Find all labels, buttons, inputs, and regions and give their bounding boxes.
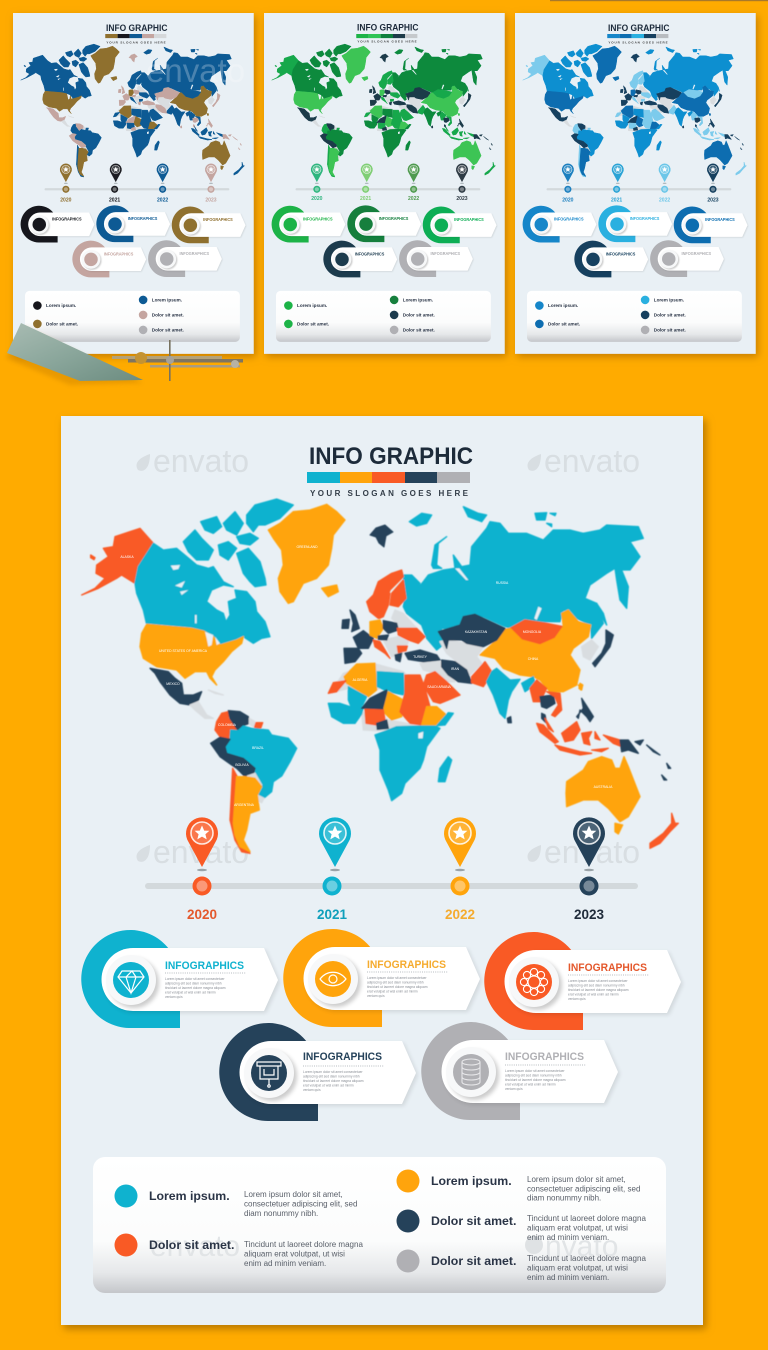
thumbnail: brown and blue variant: INFOGRAPHICS [203, 217, 233, 222]
card text [505, 1051, 586, 1091]
thumbnail: blue variant: INFOGRAPHICS [606, 251, 636, 256]
map country labels: BRAZIL [252, 746, 264, 750]
map country labels: IRAN [451, 667, 460, 671]
card text: adipiscing elit sed diam nonummy nibh [367, 980, 424, 984]
title colour bar [307, 472, 470, 483]
thumbnail: brown and blue variant: YOUR SLOGAN GOES HERE [106, 40, 166, 44]
thumbnail: green variant: INFO GRAPHIC [357, 22, 419, 32]
thumbnail: blue variant: 2022 [659, 198, 670, 204]
legend item: red [114, 1234, 363, 1268]
card text [303, 1051, 384, 1092]
watermark: envato legend right: nvato [545, 1230, 618, 1263]
timeline 2020: 2020 [187, 907, 217, 922]
card: red flower [484, 932, 683, 1030]
icon: eye [320, 972, 346, 986]
card text: Lorem ipsum dolor sit amet consectetuer [367, 976, 427, 980]
drawing compass [112, 340, 243, 381]
legend item: gray: Tincidunt ut laoreet dolore magna [527, 1254, 646, 1263]
main poster panel [61, 416, 703, 1325]
legend item: orange [396, 1170, 640, 1202]
card text: Lorem ipsum dolor sit amet consectetuer [505, 1069, 565, 1073]
card text: adipiscing elit sed diam nonummy nibh [568, 984, 625, 988]
legend item: gray [396, 1250, 646, 1282]
card text: tincidunt ut laoreet dolore magna aliquam [568, 988, 629, 992]
watermark on first thumbnail: envato [146, 52, 245, 89]
legend item: teal: diam nonummy nibh. [244, 1209, 318, 1218]
map country labels: SAUDI ARABIA [427, 685, 452, 689]
thumbnail: blue variant: INFOGRAPHICS [554, 216, 584, 221]
watermark: envato top left: envato [153, 443, 249, 479]
thumbnail: green variant [264, 13, 507, 357]
thumbnail: brown and blue variant: 2023 [205, 198, 217, 204]
thumbnail: blue variant: INFO GRAPHIC [608, 23, 670, 33]
card text: erat volutpat ut wisi enim ad minim [165, 990, 216, 994]
legend item: red: Dolor sit amet. [149, 1238, 234, 1252]
legend item: gray: aliquam erat volutpat, ut wisi [527, 1264, 628, 1272]
card text: adipiscing elit sed diam nonummy nibh [505, 1074, 562, 1078]
card text [568, 962, 649, 1001]
card text: tincidunt ut laoreet dolore magna aliquam [165, 986, 226, 990]
legend item: navy: Dolor sit amet. [431, 1214, 516, 1228]
timeline 2023: 2023 [574, 907, 605, 922]
card text: INFOGRAPHICS [303, 1051, 382, 1063]
card text: adipiscing elit sed diam nonummy nibh [303, 1074, 360, 1078]
card text: INFOGRAPHICS [505, 1051, 584, 1063]
thumbnail: green variant: Lorem ipsum. [297, 303, 327, 308]
map country labels: TURKEY [413, 655, 428, 659]
map country labels: BOLIVIA [235, 763, 249, 767]
legend item: orange: Lorem ipsum. [431, 1174, 512, 1188]
map country labels: CHINA [528, 657, 539, 661]
card text [165, 960, 246, 999]
map country labels: MONGOLIA [523, 630, 542, 634]
thumbnail: brown and blue variant: 2022 [157, 198, 168, 204]
thumbnail: green variant: Dolor sit amet. [297, 321, 329, 326]
legend panel [93, 1157, 666, 1293]
thumbnail: green variant: INFOGRAPHICS [355, 251, 385, 256]
watermark: envato legend left: envato [150, 1230, 240, 1263]
thumbnail: blue variant: 2020 [562, 198, 574, 204]
thumbnail: blue variant: 2023 [707, 198, 719, 204]
timeline 2022 [444, 817, 476, 922]
slogan: YOUR SLOGAN GOES HERE [310, 489, 469, 498]
thumbnail: blue variant: Dolor sit amet. [654, 312, 686, 317]
watermark: envato middle right: envato [544, 834, 640, 870]
legend item: teal: consectetuer adipiscing elit, sed [244, 1200, 357, 1208]
legend item: red: enim ad minim veniam. [244, 1259, 326, 1268]
card text: veniam quis [568, 997, 586, 1001]
card text: INFOGRAPHICS [165, 960, 244, 972]
card: teal diamond [81, 930, 280, 1028]
watermark: envato middle left: envato [153, 834, 249, 870]
thumbnail: brown and blue variant: 2021 [109, 198, 120, 204]
legend item: orange: diam nonummy nibh. [527, 1194, 601, 1202]
thumbnail: green variant: INFOGRAPHICS [379, 216, 409, 221]
card: navy presentation [219, 1023, 418, 1121]
legend item: orange: Lorem ipsum dolor sit amet, [527, 1175, 626, 1184]
icon: database [462, 1059, 480, 1085]
thumbnail: green variant: Dolor sit amet. [403, 327, 435, 332]
thumbnail: brown and blue variant: INFOGRAPHICS [52, 216, 82, 221]
legend item: teal: Lorem ipsum. [149, 1189, 230, 1203]
thumbnail: blue variant [515, 13, 758, 357]
thumbnail: blue variant: YOUR SLOGAN GOES HERE [608, 40, 668, 44]
thumbnail: blue variant: Dolor sit amet. [654, 327, 686, 332]
thumbnail: brown and blue variant: 2020 [60, 198, 72, 204]
thumbnail: brown and blue variant [13, 13, 256, 357]
legend item: teal [114, 1184, 357, 1218]
card text: Lorem ipsum dolor sit amet consectetuer [165, 977, 225, 981]
card text: veniam quis [367, 994, 385, 998]
legend item: orange: consectetuer adipiscing elit, sed [527, 1184, 640, 1194]
thumbnail: brown and blue variant: INFOGRAPHICS [180, 251, 209, 256]
thumbnail: green variant: Dolor sit amet. [403, 312, 435, 317]
thumbnail: blue variant: Dolor sit amet. [548, 321, 580, 326]
thumbnail: brown and blue variant: Dolor sit amet. [46, 321, 78, 326]
timeline bar [145, 883, 638, 889]
thumbnail: green variant: INFOGRAPHICS [303, 216, 333, 221]
card text: erat volutpat ut wisi enim ad minim [367, 990, 418, 994]
watermark: envato top right: envato [544, 443, 640, 479]
map country labels: ARGENTINA [234, 803, 255, 807]
card text: veniam quis [303, 1088, 321, 1092]
paper roll [6, 323, 143, 385]
main poster panel shadow [64, 420, 706, 1329]
card text: INFOGRAPHICS [568, 962, 647, 974]
thumbnail: blue variant: INFOGRAPHICS [705, 217, 735, 222]
icon: presentation board [257, 1062, 281, 1087]
timeline 2021 [317, 817, 351, 922]
card text: tincidunt ut laoreet dolore magna aliquam [367, 985, 428, 989]
title: INFO GRAPHIC [309, 443, 473, 470]
card text: INFOGRAPHICS [367, 959, 446, 971]
thumbnail: green variant: 2020 [311, 196, 323, 202]
map country labels: MEXICO [166, 682, 180, 686]
thumbnail: blue variant: Lorem ipsum. [548, 303, 578, 308]
thumbnail: green variant: 2023 [456, 196, 468, 202]
icon: diamond [118, 971, 144, 993]
card: orange eye [283, 929, 482, 1027]
thumbnail: blue variant: Lorem ipsum. [654, 297, 684, 302]
thumbnail: brown and blue variant: Dolor sit amet. [152, 312, 184, 317]
thumbnail: brown and blue variant: INFOGRAPHICS [128, 216, 158, 221]
thumbnail: brown and blue variant: Dolor sit amet. [152, 327, 184, 332]
legend item: navy: aliquam erat volutpat, ut wisi [527, 1224, 628, 1232]
thumbnail: brown and blue variant: INFOGRAPHICS [104, 251, 134, 256]
map country labels [120, 545, 613, 807]
legend item: gray: Dolor sit amet. [431, 1254, 516, 1268]
timeline 2021: 2021 [317, 907, 348, 922]
thumbnail: green variant: INFOGRAPHICS [454, 217, 484, 222]
map country labels: ALGERIA [353, 678, 368, 682]
map country labels: GREENLAND [296, 545, 318, 549]
thumbnail: green variant: 2022 [408, 196, 419, 202]
map country labels: ALASKA [120, 555, 134, 559]
map country labels: COLOMBIA [218, 723, 237, 727]
icon: flower [520, 968, 548, 996]
card text [367, 959, 448, 998]
legend item: red: Tincidunt ut laoreet dolore magna [244, 1240, 363, 1249]
legend item: navy [396, 1210, 646, 1242]
legend item: navy: Tincidunt ut laoreet dolore magna [527, 1214, 646, 1223]
card text: tincidunt ut laoreet dolore magna aliquam [505, 1078, 566, 1082]
thumbnail: green variant: Lorem ipsum. [403, 297, 433, 302]
thumbnail: blue variant: INFOGRAPHICS [682, 251, 711, 256]
legend item: teal: Lorem ipsum dolor sit amet, [244, 1190, 343, 1199]
world map [82, 499, 678, 853]
legend item: gray: enim ad minim veniam. [527, 1273, 609, 1282]
legend item: red: aliquam erat volutpat, ut wisi [244, 1250, 345, 1258]
thumbnail: green variant: INFOGRAPHICS [430, 251, 460, 256]
card text: erat volutpat ut wisi enim ad minim [568, 992, 619, 996]
thumbnail: green variant: YOUR SLOGAN GOES HERE [357, 40, 417, 44]
card text: veniam quis [505, 1087, 523, 1091]
card text: erat volutpat ut wisi enim ad minim [303, 1084, 354, 1088]
timeline 2022: 2022 [445, 907, 475, 922]
map country labels: UNITED STATES OF AMERICA [159, 649, 208, 653]
card: gray database [421, 1022, 620, 1120]
card text: adipiscing elit sed diam nonummy nibh [165, 982, 222, 986]
map country labels: RUSSIA [496, 581, 509, 585]
map country labels: KAZAKHSTAN [465, 630, 488, 634]
thumbnail: brown and blue variant: Lorem ipsum. [46, 303, 76, 308]
thumbnail: blue variant: INFOGRAPHICS [630, 216, 660, 221]
card text: Lorem ipsum dolor sit amet consectetuer [568, 979, 628, 983]
card text: erat volutpat ut wisi enim ad minim [505, 1082, 556, 1086]
card text: veniam quis [165, 995, 183, 999]
thumbnail: brown and blue variant: INFO GRAPHIC [106, 23, 168, 33]
timeline 2023 [573, 817, 605, 922]
thumbnail: green variant: 2021 [360, 196, 371, 202]
timeline 2020 [186, 817, 218, 922]
card text: tincidunt ut laoreet dolore magna aliquam [303, 1079, 364, 1083]
legend item: navy: enim ad minim veniam. [527, 1233, 609, 1242]
map country labels: AUSTRALIA [594, 785, 613, 789]
thumbnail: brown and blue variant: Lorem ipsum. [152, 297, 182, 302]
card text: Lorem ipsum dolor sit amet consectetuer [303, 1070, 363, 1074]
thumbnail: blue variant: 2021 [611, 198, 622, 204]
